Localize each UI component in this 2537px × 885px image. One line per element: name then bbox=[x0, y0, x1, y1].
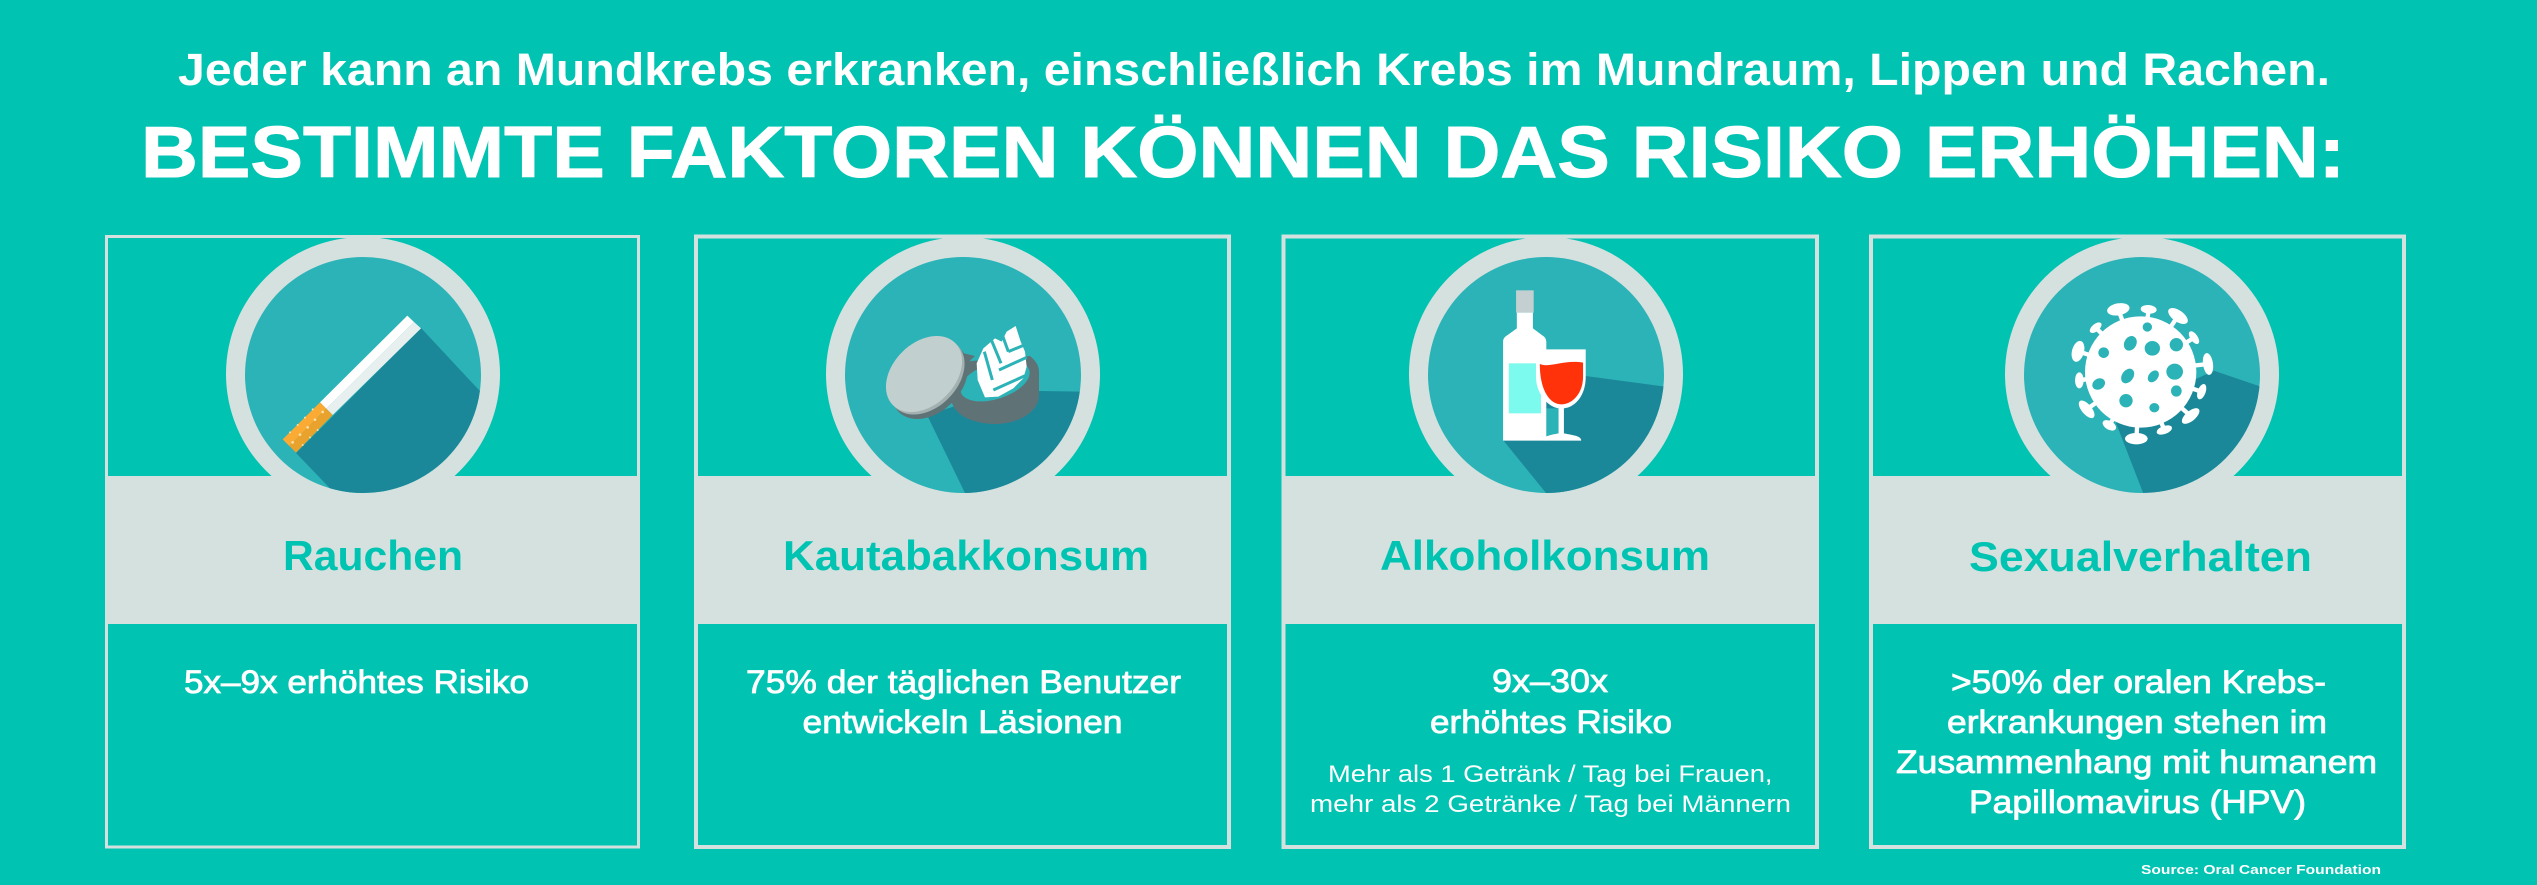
stat text: entwickeln Läsionen bbox=[802, 704, 1122, 740]
note text bbox=[1310, 761, 1791, 818]
stat text: 9x–30x bbox=[1492, 663, 1608, 699]
icon: cigarette bbox=[226, 238, 500, 493]
source note: Source: Oral Cancer Foundation bbox=[2141, 862, 2381, 877]
label band bbox=[1282, 476, 1819, 624]
heading: Kautabakkonsum: Kautabakkonsum bbox=[783, 532, 1149, 579]
stat text: erhöhtes Risiko bbox=[1430, 704, 1672, 740]
note text: mehr als 2 Getränke / Tag bei Männern bbox=[1310, 791, 1791, 818]
panel: Alkoholkonsum bbox=[1282, 236, 1819, 847]
title intro line: Jeder kann an Mundkrebs erkranken, einschließlich Krebs im Mundraum, Lippen und Rachen. bbox=[178, 44, 2330, 95]
stat text bbox=[746, 664, 1181, 740]
stat text bbox=[1430, 663, 1672, 740]
panel frame bbox=[1871, 236, 2404, 847]
panel: Kautabakkonsum bbox=[694, 236, 1231, 847]
heading: Alkoholkonsum: Alkoholkonsum bbox=[1380, 532, 1710, 579]
stat text: >50% der oralen Krebs- bbox=[1951, 664, 2326, 700]
stat text: Zusammenhang mit humanem bbox=[1896, 744, 2377, 780]
label band bbox=[105, 476, 640, 624]
panel frame bbox=[106, 236, 638, 847]
note text: Mehr als 1 Getränk / Tag bei Frauen, bbox=[1328, 761, 1772, 788]
heading: Rauchen: Rauchen bbox=[283, 532, 463, 579]
icon: chewing tobacco tin bbox=[826, 237, 1100, 511]
panel frame bbox=[1284, 236, 1817, 847]
panel: Rauchen bbox=[105, 236, 640, 847]
panel frame bbox=[696, 236, 1229, 847]
heading: Sexualverhalten: Sexualverhalten bbox=[1969, 533, 2312, 580]
main heading: BESTIMMTE FAKTOREN KÖNNEN DAS RISIKO ERHÖHEN: bbox=[141, 113, 2345, 193]
stat text bbox=[1896, 664, 2377, 820]
icon: wine bottle and glass bbox=[1409, 238, 1683, 493]
panel: Sexualverhalten bbox=[1869, 236, 2406, 847]
stat text: 75% der täglichen Benutzer bbox=[746, 664, 1181, 700]
stat text: 5x–9x erhöhtes Risiko bbox=[184, 664, 529, 700]
stat text: erkrankungen stehen im bbox=[1947, 704, 2327, 740]
stat text: Papillomavirus (HPV) bbox=[1969, 784, 2306, 820]
icon: virus bbox=[2005, 238, 2279, 493]
label band bbox=[1869, 476, 2406, 624]
label band bbox=[694, 476, 1231, 624]
